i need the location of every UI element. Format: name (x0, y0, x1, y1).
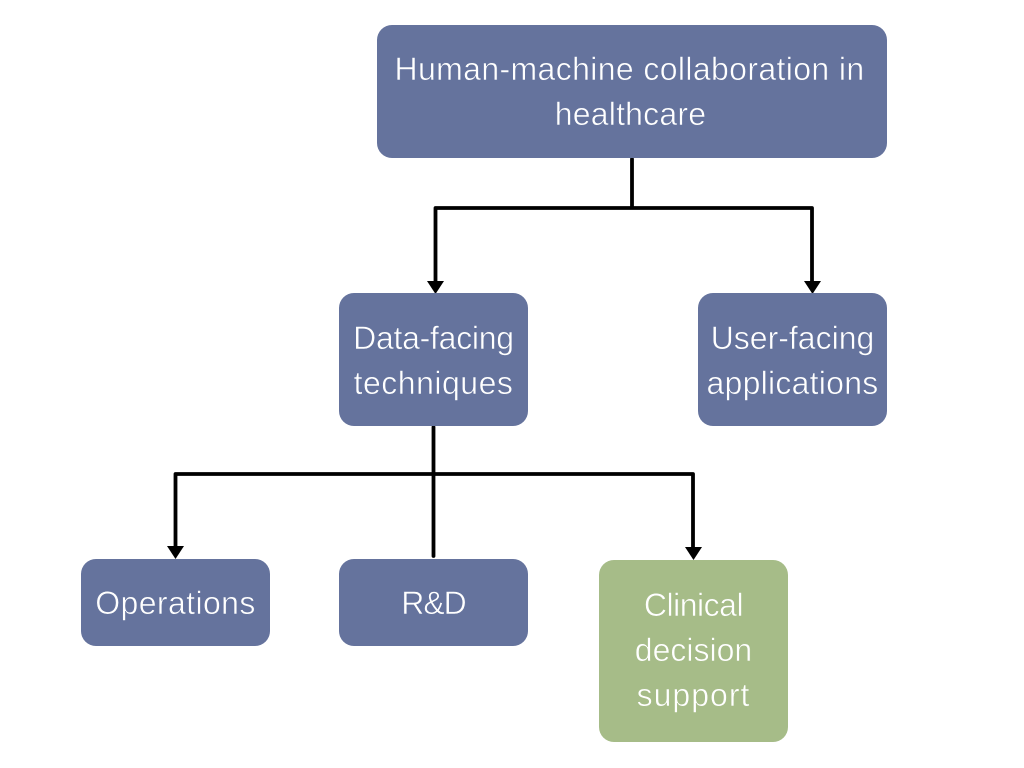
box: Human-machine collaboration in healthcare: Human-machine collaboration in (394, 50, 864, 86)
connector: Data-facing box to third-row boxes (167, 427, 702, 560)
box: Human-machine collaboration in healthcare (377, 25, 887, 158)
box: User-facing applications (698, 293, 887, 426)
box: Data-facing techniques (339, 293, 528, 426)
box: Operations (81, 559, 270, 646)
box: Clinical decision support: support (637, 676, 750, 712)
box: Clinical decision support: Clinical (644, 586, 743, 622)
box: R&D: R&D (401, 585, 466, 621)
box: Clinical decision support (599, 560, 788, 742)
box: Operations: Operations (95, 585, 256, 621)
connector: top box to second-row boxes (427, 159, 821, 294)
box: User-facing applications: User-facing (711, 320, 874, 356)
box: Data-facing techniques: techniques (354, 364, 513, 400)
box: Clinical decision support: decision (635, 632, 752, 668)
box: Data-facing techniques: Data-facing (353, 320, 514, 356)
box: R&D (339, 559, 528, 646)
box: Human-machine collaboration in healthcare: healthcare (555, 96, 706, 132)
box: User-facing applications: applications (706, 364, 878, 400)
